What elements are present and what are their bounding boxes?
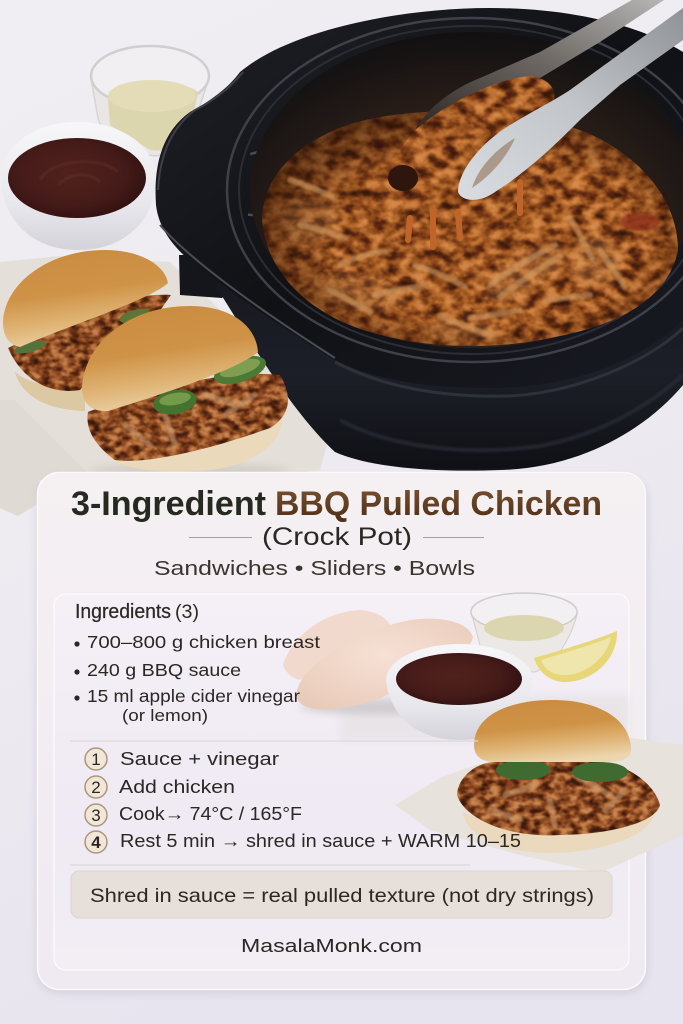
subtitle: crock pot: (Crock Pot): [262, 523, 412, 551]
photo: glass of vinegar: [471, 593, 577, 672]
rim rings: [227, 18, 683, 362]
photo: lemon wedge: [534, 631, 617, 682]
photo: napkin under burger: [395, 738, 683, 873]
photo: crock pot: [156, 0, 683, 471]
panel: ingredients and steps: [54, 593, 683, 970]
photo: glass of apple cider vinegar: [91, 46, 209, 156]
front sandwich chicken shreds: [125, 395, 255, 445]
light chicken clumps: [280, 198, 621, 339]
footer: website: MasalaMonk.com: [241, 935, 422, 956]
pot rim: [156, 8, 683, 388]
photo: linen napkin under sandwiches: [0, 256, 330, 516]
front sandwich: [82, 306, 290, 476]
step 4: Rest 5 min → shred in sauce + WARM 10–15: [120, 830, 521, 851]
ingredients list: (or lemon): [122, 706, 208, 725]
pickles: [211, 350, 269, 390]
ingredients list: 15 ml apple cider vinegar: [87, 686, 300, 706]
tongs: lower silver arm: [458, 8, 683, 200]
callout: shred in sauce: [71, 871, 612, 918]
pot foot: [179, 255, 240, 298]
rim vent tabs: [248, 149, 264, 217]
title: BBQ Pulled Chicken: [275, 485, 602, 523]
photo: burger: [457, 700, 660, 853]
back sandwich: [3, 250, 171, 411]
title: 3-Ingredient: [71, 485, 266, 523]
title: [71, 485, 602, 523]
photo: bowl of BBQ sauce: [386, 644, 533, 740]
step 2: 2: [91, 778, 101, 797]
ingredients heading: Ingredients: [75, 601, 171, 623]
burger chicken shreds: [490, 775, 625, 825]
dark sauce at food edges: [262, 111, 678, 346]
ingredients heading: (3): [175, 602, 199, 623]
pot well: [250, 32, 683, 348]
chicken shreds: [290, 180, 625, 336]
card shadow: [36, 476, 648, 994]
pot body: [215, 230, 683, 471]
steps list: [85, 748, 521, 853]
step 1: 1: [91, 750, 101, 769]
dripping strands: [408, 182, 520, 247]
chicken held by tongs: [385, 76, 554, 216]
step 2: Add chicken: [119, 776, 235, 797]
ingredients list: [74, 632, 320, 725]
callout: shred in sauce: Shred in sauce = real pulled texture (not dry strings): [90, 885, 594, 907]
step 1: [85, 748, 279, 770]
tongs: upper dark arm: [412, 0, 664, 135]
photo: bowl of BBQ sauce: [1, 122, 156, 250]
pulled chicken in pot: [262, 111, 678, 346]
step 1: Sauce + vinegar: [120, 748, 279, 769]
ingredients list: 240 g BBQ sauce: [87, 660, 241, 680]
step 2: [85, 776, 235, 798]
step 3: 3: [91, 806, 101, 825]
step 3: Cook→ 74°C / 165°F: [119, 803, 302, 824]
photo: sandwiches: [3, 250, 290, 476]
main recipe card: [38, 472, 683, 990]
serving tagline: Sandwiches • Sliders • Bowls: [154, 557, 475, 580]
step 4: 4: [91, 833, 101, 852]
ingredients list: 700–800 g chicken breast: [87, 632, 320, 652]
photo: raw chicken breasts: [283, 610, 473, 714]
